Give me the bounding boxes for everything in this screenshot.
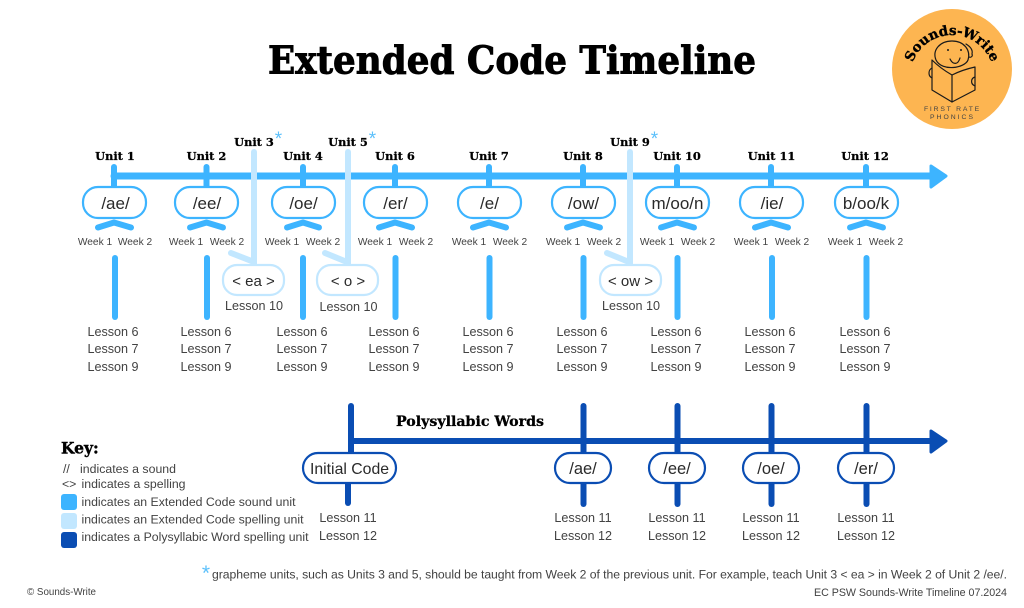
panel: polysyllabic /er/: Lesson 12 (837, 529, 895, 543)
panel: unit 12: b/oo/k (843, 194, 890, 213)
panel: polysyllabic /ae/ (554, 406, 612, 543)
panel: unit 11: Lesson 7 (744, 342, 796, 356)
panel: unit 8: Week 1 (546, 237, 581, 248)
panel: unit 9 spelling: * (651, 129, 659, 150)
panel: unit 8: Lesson 9 (556, 360, 608, 374)
panel: initial code (303, 406, 396, 543)
logo: Sounds-Write badge (892, 9, 1012, 129)
panel: unit 1: Unit 1 (95, 149, 135, 163)
title: Extended Code Timeline (268, 38, 756, 82)
panel: key: indicates a sound (80, 462, 176, 476)
panel: polysyllabic /ae/: /ae/ (569, 460, 597, 478)
panel: unit 7: Lesson 9 (462, 360, 514, 374)
panel: unit 7: Lesson 6 (462, 325, 514, 339)
panel: unit 10: m/oo/n (652, 194, 703, 213)
panel: unit 4: Lesson 9 (276, 360, 328, 374)
panel: unit 8: Unit 8 (563, 149, 603, 163)
panel: unit 11: Week 2 (775, 237, 810, 248)
panel: unit 4: Lesson 6 (276, 325, 328, 339)
panel: unit 6 (358, 149, 434, 374)
copyright: © Sounds-Write (27, 587, 97, 598)
panel: unit 11 (734, 149, 810, 374)
panel: unit 11: Unit 11 (748, 149, 795, 163)
panel: unit 12: Lesson 7 (839, 342, 891, 356)
panel: unit 8: /ow/ (568, 194, 599, 213)
panel: unit 1: /ae/ (101, 194, 130, 213)
panel: unit 2: Lesson 7 (180, 342, 232, 356)
panel: unit 1: Lesson 6 (87, 325, 139, 339)
panel: polysyllabic /ee/: Lesson 11 (648, 511, 706, 525)
panel: unit 2: Lesson 6 (180, 325, 232, 339)
panel: unit 11: Week 1 (734, 237, 769, 248)
panel: unit 10: Week 1 (640, 237, 675, 248)
panel: key: indicates an Extended Code spelling unit (82, 512, 304, 526)
panel: unit 11: Lesson 6 (744, 325, 796, 339)
panel: key: Key: (61, 438, 99, 458)
panel: unit 10: Lesson 7 (650, 342, 702, 356)
panel: unit 7: Week 2 (493, 237, 528, 248)
panel: key: indicates a Polysyllabic Word spelling unit (82, 530, 309, 544)
footnote (202, 562, 1007, 585)
panel: polysyllabic /er/: /er/ (854, 460, 878, 478)
panel: unit 1: Week 1 (78, 237, 113, 248)
panel: unit 10 (640, 149, 716, 374)
panel: unit 2 (169, 149, 245, 374)
panel: key (61, 438, 309, 548)
footnote: * (202, 562, 210, 585)
panel: unit 12: Unit 12 (841, 149, 889, 163)
arrow: polysyllabic timeline (351, 431, 946, 452)
panel: unit 8: Lesson 7 (556, 342, 608, 356)
panel: unit 10: Lesson 6 (650, 325, 702, 339)
panel: unit 3 spelling: Unit 3 (234, 135, 274, 149)
panel: unit 12: Lesson 6 (839, 325, 891, 339)
panel: key: indicates a spelling (82, 477, 186, 491)
panel: unit 11: /ie/ (761, 194, 784, 213)
panel: unit 1: Lesson 7 (87, 342, 139, 356)
panel: polysyllabic /oe/: Lesson 12 (742, 529, 800, 543)
panel: unit 7: Week 1 (452, 237, 487, 248)
panel: unit 4: Lesson 7 (276, 342, 328, 356)
panel: unit 8: Lesson 6 (556, 325, 608, 339)
panel: polysyllabic /ae/: Lesson 11 (554, 511, 612, 525)
panel: unit 4: Week 2 (306, 237, 341, 248)
panel: unit 6: /er/ (383, 194, 408, 213)
panel: unit 12: Lesson 9 (839, 360, 891, 374)
panel: unit 7 (452, 149, 528, 374)
panel: unit 2: /ee/ (193, 194, 221, 213)
panel: unit 1: Lesson 9 (87, 360, 139, 374)
panel: unit 2: Unit 2 (187, 149, 226, 163)
panel: key: indicates an Extended Code sound unit (82, 495, 296, 509)
panel: unit 5 spelling (317, 129, 378, 314)
footnote: grapheme units, such as Units 3 and 5, should be taught from Week 2 of the previous unit. For example, teach Unit 3 < ea > in Week 2 of Unit 2 /ee/. (212, 568, 1007, 582)
panel: unit 5 spelling: Lesson 10 (319, 300, 378, 314)
panel: key: // (63, 462, 70, 476)
panel: unit 3 spelling: Lesson 10 (225, 299, 283, 313)
panel: unit 4: /oe/ (289, 194, 318, 213)
panel: unit 2: Week 2 (210, 237, 245, 248)
panel: unit 6: Unit 6 (375, 149, 415, 163)
panel: unit 9 spelling: < ow > (608, 273, 653, 290)
panel: unit 4: Week 1 (265, 237, 300, 248)
panel: polysyllabic /er/ (837, 406, 895, 543)
panel: unit 9 spelling (600, 129, 661, 313)
panel: initial code: Initial Code (310, 461, 389, 478)
panel: unit 12: Week 1 (828, 237, 863, 248)
panel: unit 1 (78, 149, 153, 374)
panel: unit 5 spelling: < o > (331, 273, 365, 290)
panel: unit 3 spelling: * (275, 129, 283, 150)
document reference: EC PSW Sounds-Write Timeline 07.2024 (814, 587, 1007, 599)
logo: Sounds-Write badge: FIRST RATE (924, 106, 981, 113)
panel: unit 4 (265, 149, 341, 374)
panel: unit 7: Unit 7 (469, 149, 509, 163)
panel: polysyllabic /ee/ (648, 406, 706, 543)
panel: polysyllabic /er/: Lesson 11 (837, 511, 895, 525)
panel: unit 5 spelling: Unit 5 (328, 135, 368, 149)
panel: polysyllabic /ee/: /ee/ (663, 460, 691, 478)
panel: unit 11: Lesson 9 (744, 360, 796, 374)
panel: unit 9 spelling: Unit 9 (610, 135, 650, 149)
panel: unit 6: Week 2 (399, 237, 434, 248)
panel: unit 12: Week 2 (869, 237, 904, 248)
logo: Sounds-Write badge: PHONICS (930, 114, 975, 121)
panel: unit 10: Lesson 9 (650, 360, 702, 374)
heading: polysyllabic words: Polysyllabic Words (396, 414, 544, 430)
panel: unit 6: Lesson 6 (368, 325, 420, 339)
panel: unit 12 (828, 149, 904, 374)
panel: unit 6: Week 1 (358, 237, 393, 248)
panel: key: <> (62, 477, 76, 491)
arrow: extended code main timeline (114, 166, 946, 187)
panel: unit 6: Lesson 7 (368, 342, 420, 356)
panel: unit 2: Week 1 (169, 237, 204, 248)
panel: polysyllabic /ee/: Lesson 12 (648, 529, 706, 543)
panel: unit 8: Week 2 (587, 237, 622, 248)
panel: unit 3 spelling: < ea > (232, 273, 275, 290)
panel: initial code: Lesson 11 (319, 511, 377, 525)
panel: initial code: Lesson 12 (319, 529, 377, 543)
panel: polysyllabic /oe/ (742, 406, 800, 543)
panel: unit 1: Week 2 (118, 237, 153, 248)
logo: Sounds-Write badge: Sounds-Write (904, 24, 997, 62)
panel: unit 10: Week 2 (681, 237, 716, 248)
panel: unit 3 spelling (223, 129, 284, 313)
panel: unit 9 spelling: Lesson 10 (602, 299, 660, 313)
panel: unit 10: Unit 10 (653, 149, 701, 163)
panel: polysyllabic /oe/: Lesson 11 (742, 511, 800, 525)
panel: unit 6: Lesson 9 (368, 360, 420, 374)
panel: unit 4: Unit 4 (283, 149, 323, 163)
panel: unit 8 (546, 149, 622, 374)
panel: polysyllabic /ae/: Lesson 12 (554, 529, 612, 543)
panel: unit 7: /e/ (480, 194, 499, 213)
panel: unit 7: Lesson 7 (462, 342, 514, 356)
panel: polysyllabic /oe/: /oe/ (757, 460, 785, 478)
panel: unit 5 spelling: * (369, 129, 377, 150)
panel: unit 2: Lesson 9 (180, 360, 232, 374)
